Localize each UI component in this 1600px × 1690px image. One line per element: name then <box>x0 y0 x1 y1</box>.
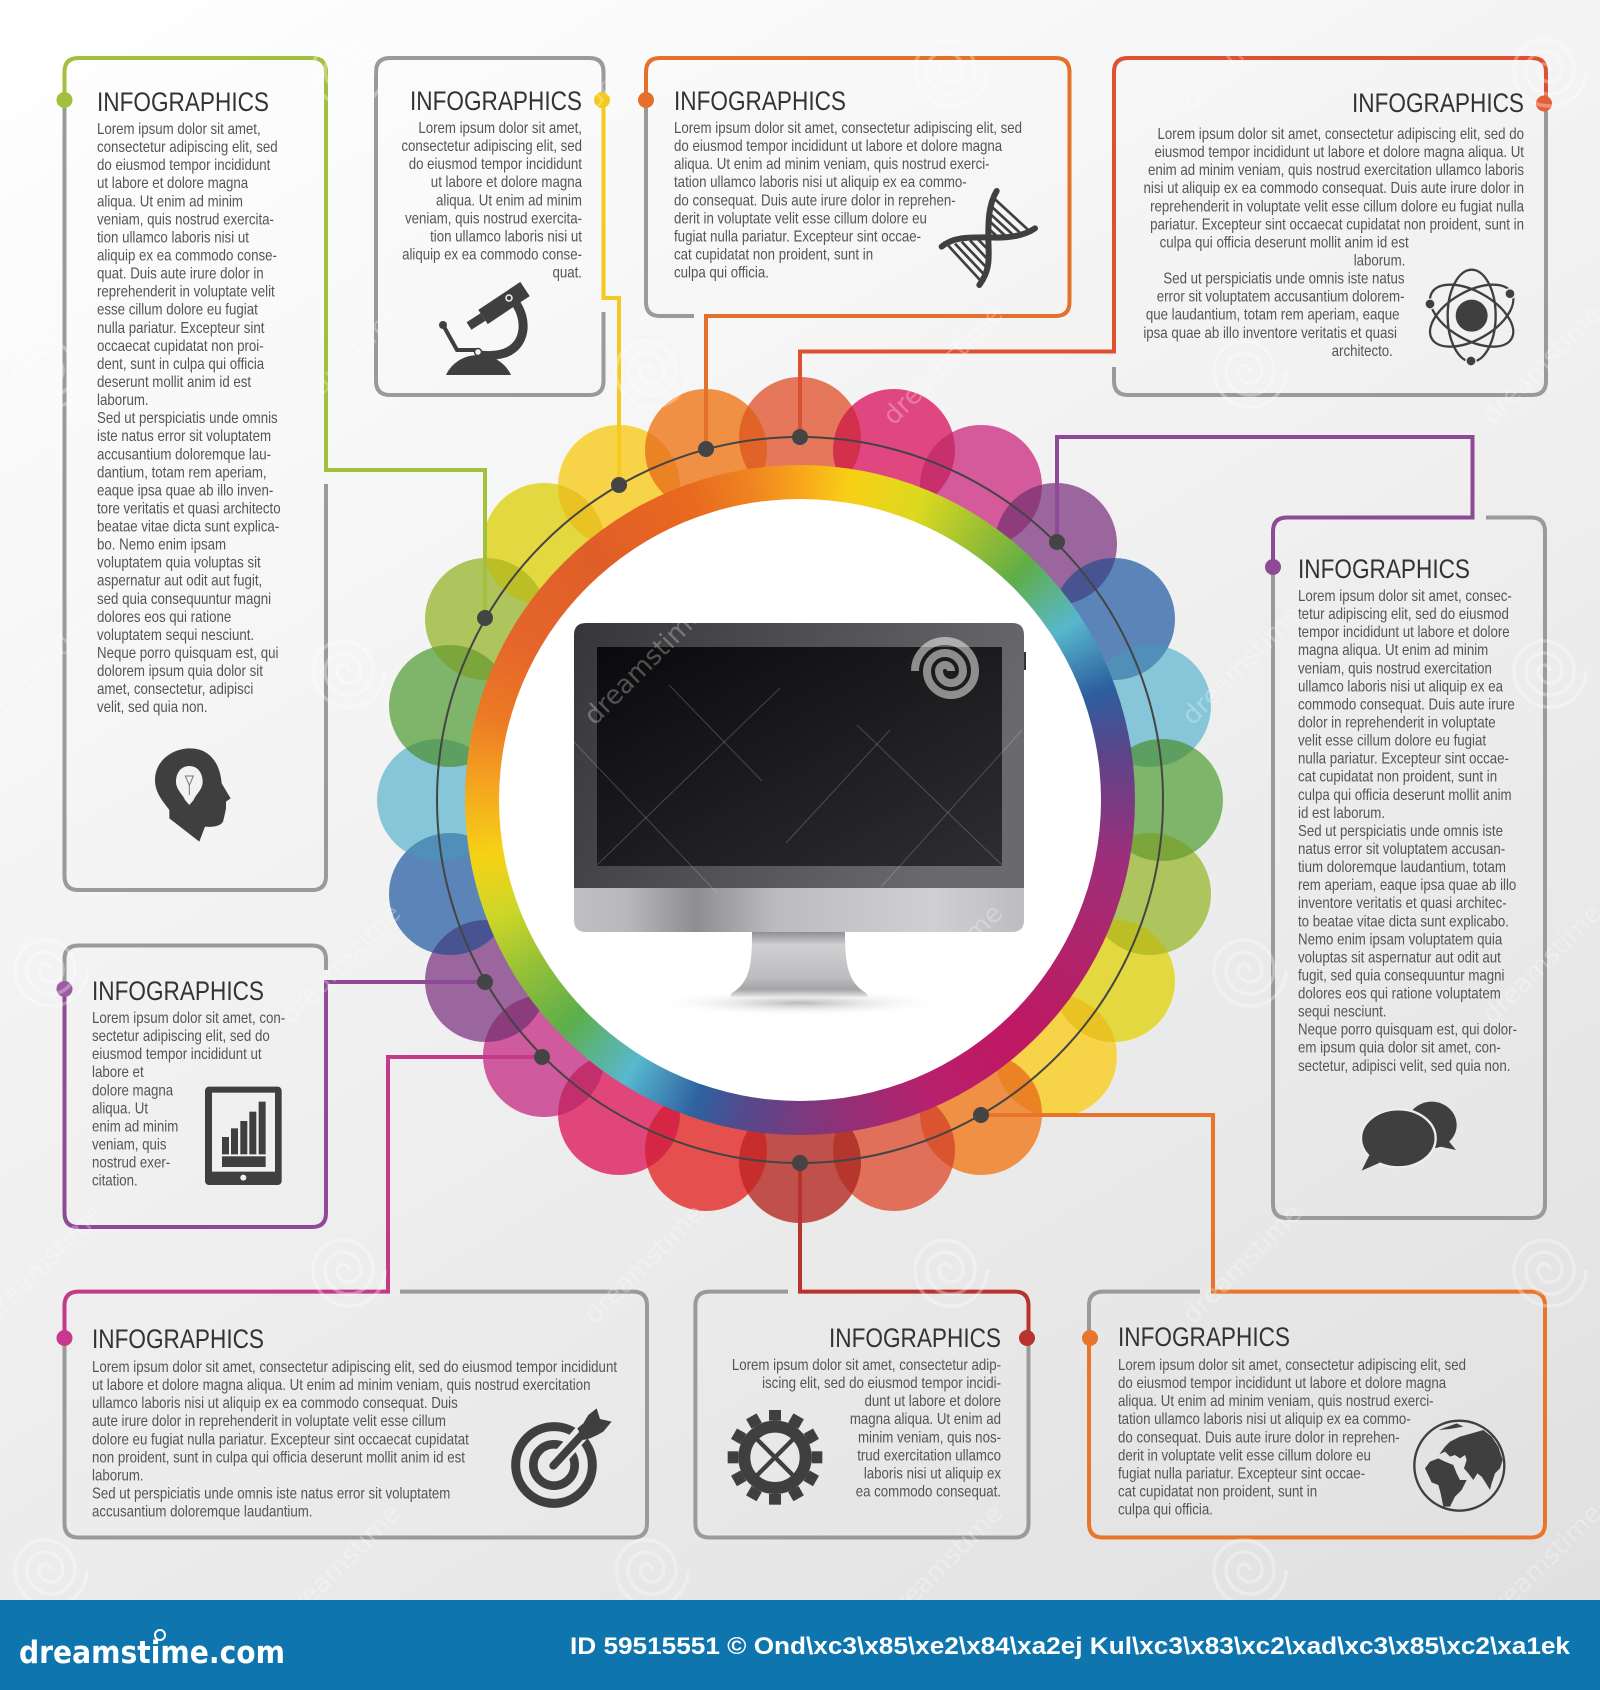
body text: ea commodo consequat. <box>856 1483 1001 1501</box>
body text: sectetur adipiscing elit, sed do <box>92 1028 270 1045</box>
body text: aute irure dolor in reprehenderit in voluptate velit esse cillum <box>92 1413 446 1431</box>
body text: esse cillum dolore eu fugiat <box>97 302 258 319</box>
body text: Lorem ipsum dolor sit amet, consectetur adipiscing elit, sed <box>1118 1357 1466 1374</box>
monitor chin <box>574 885 1024 932</box>
heading: INFOGRAPHICS <box>97 87 269 117</box>
body text: aliqua. Ut enim ad minim veniam, quis nostrud exerci- <box>674 156 990 173</box>
monitor screen <box>597 647 1002 866</box>
body text <box>1298 588 1517 1075</box>
body text: eiusmod tempor incididunt ut labore et dolore magna aliqua. Ut <box>1155 144 1524 161</box>
watermark wordmarks: dreamstime <box>1177 1199 1308 1330</box>
body text <box>97 121 281 717</box>
body text: ipsa quae ab illo inventore veritatis et quasi <box>1143 325 1397 342</box>
body text: nostrud exer- <box>92 1155 170 1172</box>
body text: culpa qui officia deserunt mollit anim <box>1298 787 1512 804</box>
panel 2: yellow <box>376 58 619 485</box>
frame <box>695 1292 1028 1538</box>
body text: inventore veritatis et quasi architec- <box>1298 895 1507 913</box>
body text: beatae vitae dicta sunt explica- <box>97 518 279 536</box>
footer logo: dreamstime.com <box>19 1635 285 1671</box>
connection nodes <box>477 429 1065 1171</box>
body text: veniam, quis nostrud exercitation <box>1298 660 1492 678</box>
body text: velit, sed quia non. <box>97 699 208 717</box>
body text: Lorem ipsum dolor sit amet, <box>97 121 261 138</box>
watermark wordmarks: dreamstime <box>878 1499 1009 1630</box>
icon: microscope <box>439 289 525 375</box>
frame <box>646 100 694 316</box>
watermark wordmarks: dreamstime <box>579 1199 710 1330</box>
body text: dolores eos qui ratione voluptatem <box>1298 985 1501 1003</box>
body text <box>1118 1357 1466 1519</box>
heading: INFOGRAPHICS <box>410 86 582 116</box>
heading: INFOGRAPHICS <box>674 86 846 116</box>
watermark wordmarks: dreamstime <box>878 300 1009 431</box>
body text: laborum. <box>92 1467 144 1485</box>
connector dot <box>56 981 72 997</box>
body text: iscing elit, sed do eiusmod tempor incidi- <box>762 1375 1001 1392</box>
connector dot <box>1082 1330 1098 1346</box>
body text: aliqua. Ut enim ad minim veniam, quis nostrud exerci- <box>1118 1393 1434 1410</box>
body text: laborum. <box>97 392 149 409</box>
body text: id est laborum. <box>1298 805 1385 822</box>
body text: reprehenderit in voluptate velit <box>97 284 275 301</box>
body text: magna aliqua. Ut enim ad minim <box>1298 642 1488 660</box>
body text: sectetur, adipisci velit, sed quia non. <box>1298 1058 1510 1075</box>
panel 3: orange <box>638 58 1070 449</box>
body text: ut labore et dolore magna <box>97 175 249 193</box>
body text: commodo consequat. Duis aute irure <box>1298 696 1515 714</box>
body text: natus error sit voluptatem accusan- <box>1298 841 1505 858</box>
body text: do consequat. Duis aute irure dolor in reprehen- <box>674 192 956 210</box>
body text: do eiusmod tempor incididunt ut labore et dolore magna <box>1118 1375 1447 1392</box>
frame <box>1273 518 1545 1218</box>
body text: velit esse cillum dolore eu fugiat <box>1298 733 1486 750</box>
rainbow ring <box>465 465 1135 1135</box>
body text <box>1143 126 1525 360</box>
connector dot <box>56 92 72 108</box>
connector dot <box>1019 1330 1035 1346</box>
body text: tation ullamco laboris nisi ut aliquip ex ea commo- <box>1118 1411 1411 1429</box>
body text: dolore eu fugiat nulla pariatur. Excepteur sint occaecat cupidatat <box>92 1431 469 1449</box>
body text: eaque ipsa quae ab illo inven- <box>97 482 273 500</box>
connector dot <box>1536 96 1552 112</box>
body text: sequi nesciunt. <box>1298 1004 1387 1021</box>
watermark wordmarks: dreamstime <box>579 600 710 731</box>
icon: chat bubbles <box>1361 1102 1457 1171</box>
body text: Sed ut perspiciatis unde omnis iste <box>1298 823 1503 840</box>
body text: magna aliqua. Ut enim ad <box>850 1411 1001 1429</box>
body text: minim veniam, quis nos- <box>858 1429 1001 1447</box>
watermark wordmarks: dreamstime <box>276 300 407 431</box>
body text: Lorem ipsum dolor sit amet, con- <box>92 1010 285 1027</box>
body text: ullamco laboris nisi ut aliquip ex ea commodo consequat. Duis <box>92 1395 458 1412</box>
body text: aliqua. Ut enim ad minim <box>97 193 243 211</box>
body text: Sed ut perspiciatis unde omnis iste natus error sit voluptatem <box>92 1485 450 1503</box>
frame <box>1114 103 1546 395</box>
body text: Lorem ipsum dolor sit amet, consectetur adip- <box>732 1357 1001 1374</box>
body text: tion ullamco laboris nisi ut <box>97 229 249 247</box>
body text: tore veritatis et quasi architecto <box>97 500 281 518</box>
body text: cat cupidatat non proident, sunt in <box>1118 1483 1317 1501</box>
heading: INFOGRAPHICS <box>92 976 264 1006</box>
body text: nulla pariatur. Excepteur sint <box>97 320 264 337</box>
connector line <box>64 1057 542 1338</box>
body text: Sed ut perspiciatis unde omnis <box>97 410 278 427</box>
monitor bezel <box>574 623 1024 888</box>
body text: Lorem ipsum dolor sit amet, consec- <box>1298 588 1512 605</box>
body text: culpa qui officia deserunt mollit anim id est <box>1160 234 1409 252</box>
icon: DNA helix <box>942 191 1035 285</box>
body text: do consequat. Duis aute irure dolor in reprehen- <box>1118 1429 1400 1447</box>
monitor shadow <box>650 990 950 1016</box>
body text: tium doloremque laudantium, totam <box>1298 859 1506 876</box>
panel 9: orange <box>981 1115 1545 1538</box>
body text: consectetur adipiscing elit, sed <box>401 138 582 155</box>
body text <box>732 1357 1002 1501</box>
body text <box>401 120 583 282</box>
body text: fugiat nulla pariatur. Excepteur sint occae- <box>1118 1465 1365 1483</box>
body text: quat. Duis aute irure dolor in <box>97 266 264 283</box>
body text: enim ad minim <box>92 1118 178 1136</box>
body text <box>674 120 1022 282</box>
body text: Nemo enim ipsam voluptatem quia <box>1298 931 1503 949</box>
body text: em ipsum quia dolor sit amet, con- <box>1298 1040 1501 1057</box>
body text: trud exercitation ullamco <box>857 1447 1001 1465</box>
body text: quat. <box>552 265 582 282</box>
body text: ullamco laboris nisi ut aliquip ex ea <box>1298 678 1504 696</box>
body text: iste natus error sit voluptatem <box>97 428 271 446</box>
body text: reprehenderit in voluptate velit esse cillum dolore eu fugiat nulla <box>1150 198 1525 216</box>
heading: INFOGRAPHICS <box>92 1324 264 1354</box>
connector line <box>604 100 619 485</box>
body text: Sed ut perspiciatis unde omnis iste natus <box>1163 271 1404 288</box>
body text: do eiusmod tempor incididunt <box>409 156 582 173</box>
body text: tetur adipiscing elit, sed do eiusmod <box>1298 606 1509 623</box>
icon: atom <box>1420 270 1523 366</box>
body text: fugit, sed quia consequuntur magni <box>1298 967 1504 985</box>
heading: INFOGRAPHICS <box>1352 88 1524 118</box>
body text: sed quia consequuntur magni <box>97 591 271 608</box>
icon: tablet with bar chart <box>205 1087 282 1185</box>
body text: do eiusmod tempor incididunt <box>97 157 270 174</box>
icon: target with arrow <box>516 1408 612 1503</box>
frame <box>64 1292 647 1538</box>
body text: pariatur. Excepteur sint occaecat cupidatat non proident, sunt in <box>1150 216 1524 234</box>
body text: Neque porro quisquam est, qui dolor- <box>1298 1022 1517 1039</box>
body text: dolores eos qui ratione <box>97 609 231 626</box>
footer logo spiral mark <box>155 1630 165 1640</box>
body text: tation ullamco laboris nisi ut aliquip ex ea commo- <box>674 174 967 192</box>
body text: voluptatem quia voluptas sit <box>97 555 261 572</box>
body text: aspernatur aut odit aut fugit, <box>97 573 262 590</box>
body text: dantium, totam rem aperiam, <box>97 464 267 482</box>
body text: derit in voluptate velit esse cillum dolore eu <box>1118 1447 1371 1465</box>
body text: dolorem ipsum quia dolor sit <box>97 663 263 680</box>
body text: nisi ut aliquip ex ea commodo consequat. Duis aute irure dolor in <box>1143 180 1524 198</box>
body text: Lorem ipsum dolor sit amet, <box>418 120 582 137</box>
body text: rem aperiam, eaque ipsa quae ab illo <box>1298 877 1516 894</box>
connector dot <box>1265 559 1281 575</box>
connector dot <box>56 1330 72 1346</box>
heading: INFOGRAPHICS <box>829 1323 1001 1353</box>
body text: dolor in reprehenderit in voluptate <box>1298 714 1496 732</box>
body text: voluptas sit aspernatur aut odit aut <box>1298 949 1501 967</box>
monitor stand <box>730 932 868 997</box>
body text: do eiusmod tempor incididunt ut labore et dolore magna <box>674 138 1003 155</box>
body text: Lorem ipsum dolor sit amet, consectetur adipiscing elit, sed <box>674 120 1022 137</box>
watermark wordmarks: dreamstime <box>276 899 407 1030</box>
body text: veniam, quis nostrud exercita- <box>405 210 582 228</box>
body text: accusantium doloremque laudantium. <box>92 1504 312 1521</box>
connector dot <box>594 92 610 108</box>
body text: consectetur adipiscing elit, sed <box>97 139 278 156</box>
monitor <box>574 623 1026 1016</box>
frame <box>64 946 326 989</box>
body text: laborum. <box>1354 252 1405 270</box>
panel 1: green <box>56 58 485 890</box>
connector line <box>646 58 1070 449</box>
body text: derit in voluptate velit esse cillum dolore eu <box>674 210 927 228</box>
body text: cat cupidatat non proident, sunt in <box>1298 769 1497 786</box>
white centre disc <box>499 499 1101 1101</box>
body text: citation. <box>92 1173 138 1190</box>
watermark spiral on screen <box>915 641 975 695</box>
panel 4: red-orange <box>800 58 1552 437</box>
body text: fugiat nulla pariatur. Excepteur sint occae- <box>674 228 921 246</box>
icon: globe <box>1414 1421 1504 1511</box>
body text: enim ad minim veniam, quis nostrud exercitation ullamco laboris <box>1148 162 1524 179</box>
icon: head with light bulb <box>155 748 231 842</box>
body text: to beatae vitae dicta sunt explicabo. <box>1298 913 1509 931</box>
panel 8: dark red <box>695 1163 1035 1538</box>
footer credit: ID 59515551 © Ond\xc3\x85\xe2\x84\xa2ej Kul\xc3\x83\xc2\xad\xc3\x85\xc2\xa1ek <box>570 1633 1571 1660</box>
body text <box>92 1010 285 1190</box>
body text: Lorem ipsum dolor sit amet, consectetur adipiscing elit, sed do <box>1158 126 1524 143</box>
panel 6: violet <box>56 946 485 1227</box>
body text: deserunt mollit anim id est <box>97 374 251 391</box>
connector dot <box>638 92 654 108</box>
body text: error sit voluptatem accusantium dolorem- <box>1157 289 1405 306</box>
body text: ut labore et dolore magna aliqua. Ut enim ad minim veniam, quis nostrud exercitation <box>92 1377 590 1394</box>
heading: INFOGRAPHICS <box>1118 1322 1290 1352</box>
body text: dent, sunt in culpa qui officia <box>97 356 265 373</box>
body text: nulla pariatur. Excepteur sint occae- <box>1298 751 1509 768</box>
body text: labore et <box>92 1064 144 1082</box>
frame <box>376 58 604 395</box>
body text: veniam, quis nostrud exercita- <box>97 211 274 229</box>
heading: INFOGRAPHICS <box>1298 554 1470 584</box>
body text: veniam, quis <box>92 1136 166 1154</box>
connector line <box>64 58 485 618</box>
body text: accusantium doloremque lau- <box>97 446 271 464</box>
body text: Lorem ipsum dolor sit amet, consectetur adipiscing elit, sed do eiusmod tempor incididunt <box>92 1359 617 1376</box>
connector line <box>64 982 485 1227</box>
connector line <box>981 1115 1545 1538</box>
body text: tempor incididunt ut labore et dolore <box>1298 624 1510 641</box>
body text: occaecat cupidatat non proi- <box>97 338 264 355</box>
footer bar <box>0 1600 1600 1690</box>
frame <box>1089 1292 1200 1338</box>
orbit circle <box>437 437 1163 1163</box>
body text: amet, consectetur, adipisci <box>97 681 253 699</box>
watermark wordmarks: dreamstime <box>878 899 1009 1030</box>
connector line <box>800 58 1546 437</box>
body text: culpa qui officia. <box>1118 1502 1213 1519</box>
panel 5: purple <box>1057 437 1545 1218</box>
body text: aliqua. Ut <box>92 1100 148 1118</box>
frame <box>64 100 326 890</box>
body text: eiusmod tempor incididunt ut <box>92 1046 262 1063</box>
body text: bo. Nemo enim ipsam <box>97 537 226 554</box>
body text: architecto. <box>1332 343 1393 360</box>
body text: aliquip ex ea commodo conse- <box>402 246 582 264</box>
body text: dunt ut labore et dolore <box>865 1393 1001 1410</box>
monitor side button <box>1024 652 1026 670</box>
body text: Neque porro quisquam est, qui <box>97 645 278 662</box>
icon: gear <box>728 1410 822 1505</box>
panel 7: pink <box>56 1057 647 1538</box>
body text: tion ullamco laboris nisi ut <box>430 228 582 246</box>
body text: ut labore et dolore magna <box>431 174 583 192</box>
watermark wordmarks: dreamstime <box>276 1499 407 1630</box>
body text: aliquip ex ea commodo conse- <box>97 247 277 265</box>
body text <box>92 1359 617 1521</box>
body text: non proident, sunt in culpa qui officia deserunt mollit anim id est <box>92 1449 465 1467</box>
body text: culpa qui officia. <box>674 265 769 282</box>
watermark wordmarks: dreamstime <box>1177 600 1308 731</box>
connector line <box>1057 437 1472 567</box>
body text: laboris nisi ut aliquip ex <box>864 1465 1002 1483</box>
body text: dolore magna <box>92 1082 174 1100</box>
body text: cat cupidatat non proident, sunt in <box>674 246 873 264</box>
connector line <box>800 1163 1028 1338</box>
body text: aliqua. Ut enim ad minim <box>436 192 582 210</box>
body text: voluptatem sequi nesciunt. <box>97 627 254 644</box>
body text: que laudantium, totam rem aperiam, eaque <box>1146 307 1400 324</box>
screen glints <box>574 685 1022 893</box>
